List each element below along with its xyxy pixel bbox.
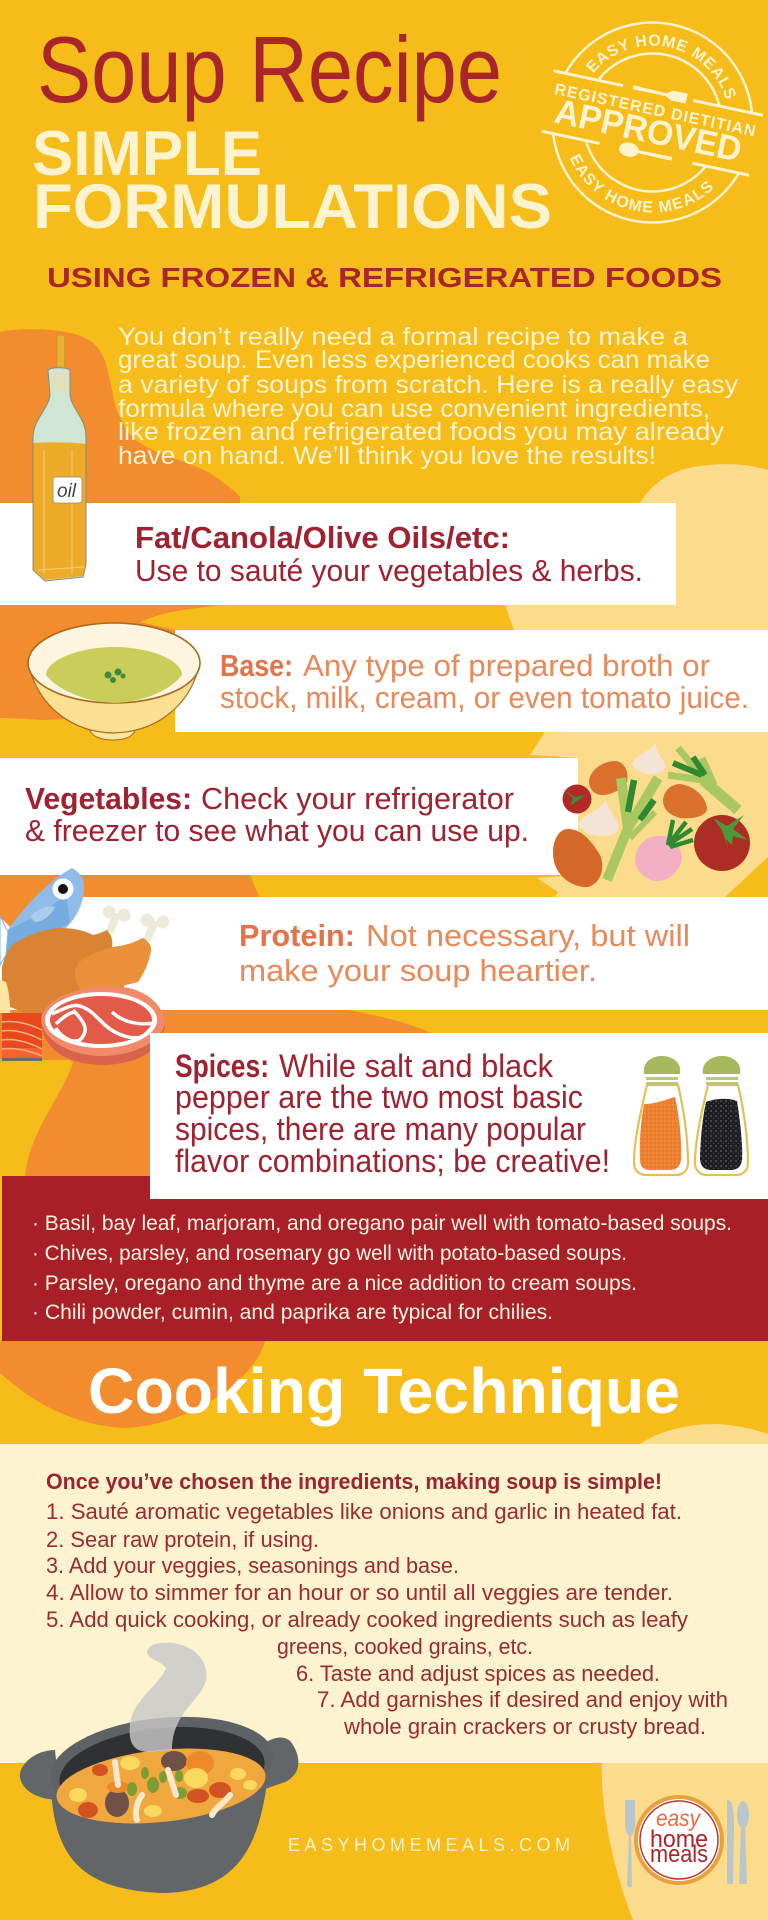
- panel: vegetables: & freezer to see what you can use up.: [25, 813, 529, 848]
- icon: salmon: [2, 1013, 42, 1061]
- panel: cooking steps: 4. Allow to simmer for an hour or so until all veggies are tender.: [46, 1580, 673, 1605]
- stamp: registered dietitian approved: EASY HOME MEALS: [586, 34, 736, 99]
- panel: protein: [0, 897, 768, 1010]
- background shape: lower orange blob: [0, 1341, 265, 1428]
- stamp: registered dietitian approved: EASY HOME MEALS: [570, 154, 712, 212]
- panel: cooking steps: Once you’ve chosen the ingredients, making soup is simple!: [46, 1469, 662, 1494]
- background shape: upper light blob: [505, 464, 768, 897]
- title: Soup Recipe: [37, 17, 502, 122]
- icon: oil bottle: [33, 335, 86, 581]
- subtitle: simple formulations: FORMULATIONS: [33, 172, 552, 242]
- panel: spices list: · Parsley, oregano and thyme are a nice addition to cream soups.: [32, 1272, 637, 1295]
- panel: base: Base:: [220, 648, 293, 683]
- panel: vegetables: Check your refrigerator: [201, 781, 514, 816]
- panel: spices list: · Basil, bay leaf, marjoram, and oregano pair well with tomato-based soups.: [32, 1212, 732, 1235]
- panel: base: stock, milk, cream, or even tomato juice.: [220, 680, 749, 715]
- logo: easy home meals: home: [650, 1826, 708, 1853]
- panel: spices: flavor combinations; be creative!: [175, 1143, 610, 1179]
- icon: salt and pepper shakers: [634, 1056, 748, 1175]
- panel: spices: pepper are the two most basic: [175, 1079, 583, 1115]
- panel: spices list: · Chili powder, cumin, and paprika are typical for chilies.: [32, 1301, 553, 1324]
- panel: spices: While salt and black: [279, 1048, 554, 1084]
- heading: using frozen and refrigerated foods: USING FROZEN & REFRIGERATED FOODS: [47, 262, 722, 293]
- panel: spices: Spices:: [175, 1048, 269, 1084]
- intro text: great soup. Even less experienced cooks can make: [118, 346, 710, 374]
- background shape: lower light blob: [602, 1424, 768, 1920]
- logo: easy home meals: [625, 1797, 749, 1887]
- subtitle: simple formulations: [32, 119, 552, 242]
- logo: easy home meals: meals: [650, 1841, 708, 1868]
- intro text: like frozen and refrigerated foods you may already: [118, 418, 725, 446]
- subtitle: simple formulations: SIMPLE: [32, 119, 262, 189]
- background shape: middle orange blob: [0, 875, 431, 1176]
- icon: soup bowl: [28, 623, 200, 740]
- icon: soup pot: [20, 1643, 298, 1893]
- intro text: [118, 323, 739, 470]
- footer website: EASYHOMEMEALS.COM: [288, 1835, 570, 1855]
- panel: spices: spices, there are many popular: [175, 1111, 586, 1147]
- panel: fat and oils: Fat/Canola/Olive Oils/etc:: [135, 520, 510, 555]
- stamp: registered dietitian approved: [542, 21, 764, 224]
- panel: vegetables: [0, 758, 578, 875]
- icon: vegetables: [553, 743, 750, 887]
- icon: steak: [41, 986, 165, 1065]
- panel: protein: make your soup heartier.: [239, 953, 597, 988]
- background shape: upper orange blob: [0, 329, 240, 720]
- stamp: registered dietitian approved: REGISTERED DIETITIAN: [553, 81, 757, 140]
- panel: cooking steps: 1. Sauté aromatic vegetables like onions and garlic in heated fat.: [46, 1499, 682, 1524]
- intro text: a variety of soups from scratch. Here is a really easy: [118, 371, 739, 399]
- intro text: formula where you can use convenient ingredients,: [118, 395, 710, 423]
- icon: fish: [0, 868, 84, 965]
- logo: easy home meals: easy: [656, 1805, 701, 1831]
- intro text: You don’t really need a formal recipe to make a: [118, 323, 688, 351]
- panel: cooking steps: [0, 1444, 768, 1763]
- panel: base: [175, 630, 768, 732]
- icon: roast turkey: [0, 906, 170, 1025]
- panel: fat and oils: Use to sauté your vegetables & herbs.: [135, 553, 643, 588]
- heading: cooking technique: Cooking Technique: [88, 1355, 680, 1427]
- panel: cooking steps: whole grain crackers or crusty bread.: [343, 1714, 706, 1739]
- panel: base: Any type of prepared broth or: [303, 648, 710, 683]
- steam: [130, 1643, 207, 1752]
- panel: spices: [150, 1033, 768, 1199]
- panel: spices list: [2, 1176, 768, 1341]
- intro text: have on hand. We’ll think you love the results!: [118, 442, 656, 470]
- icon: oil bottle: oil: [57, 481, 77, 502]
- panel: cooking steps: 3. Add your veggies, seasonings and base.: [46, 1553, 459, 1578]
- panel: cooking steps: greens, cooked grains, etc.: [277, 1634, 533, 1659]
- panel: protein: Not necessary, but will: [366, 918, 690, 953]
- panel: cooking steps: 5. Add quick cooking, or already cooked ingredients such as leafy: [46, 1607, 688, 1632]
- panel: cooking steps: 6. Taste and adjust spices as needed.: [296, 1661, 660, 1686]
- panel: protein: Protein:: [239, 918, 355, 953]
- stamp: registered dietitian approved: APPROVED: [551, 92, 745, 170]
- panel: cooking steps: 2. Sear raw protein, if using.: [46, 1527, 319, 1552]
- panel: spices list: · Chives, parsley, and rosemary go well with potato-based soups.: [32, 1242, 627, 1265]
- panel: fat and oils: [0, 503, 676, 605]
- panel: cooking steps: 7. Add garnishes if desired and enjoy with: [317, 1687, 728, 1712]
- panel: vegetables: Vegetables:: [25, 781, 192, 816]
